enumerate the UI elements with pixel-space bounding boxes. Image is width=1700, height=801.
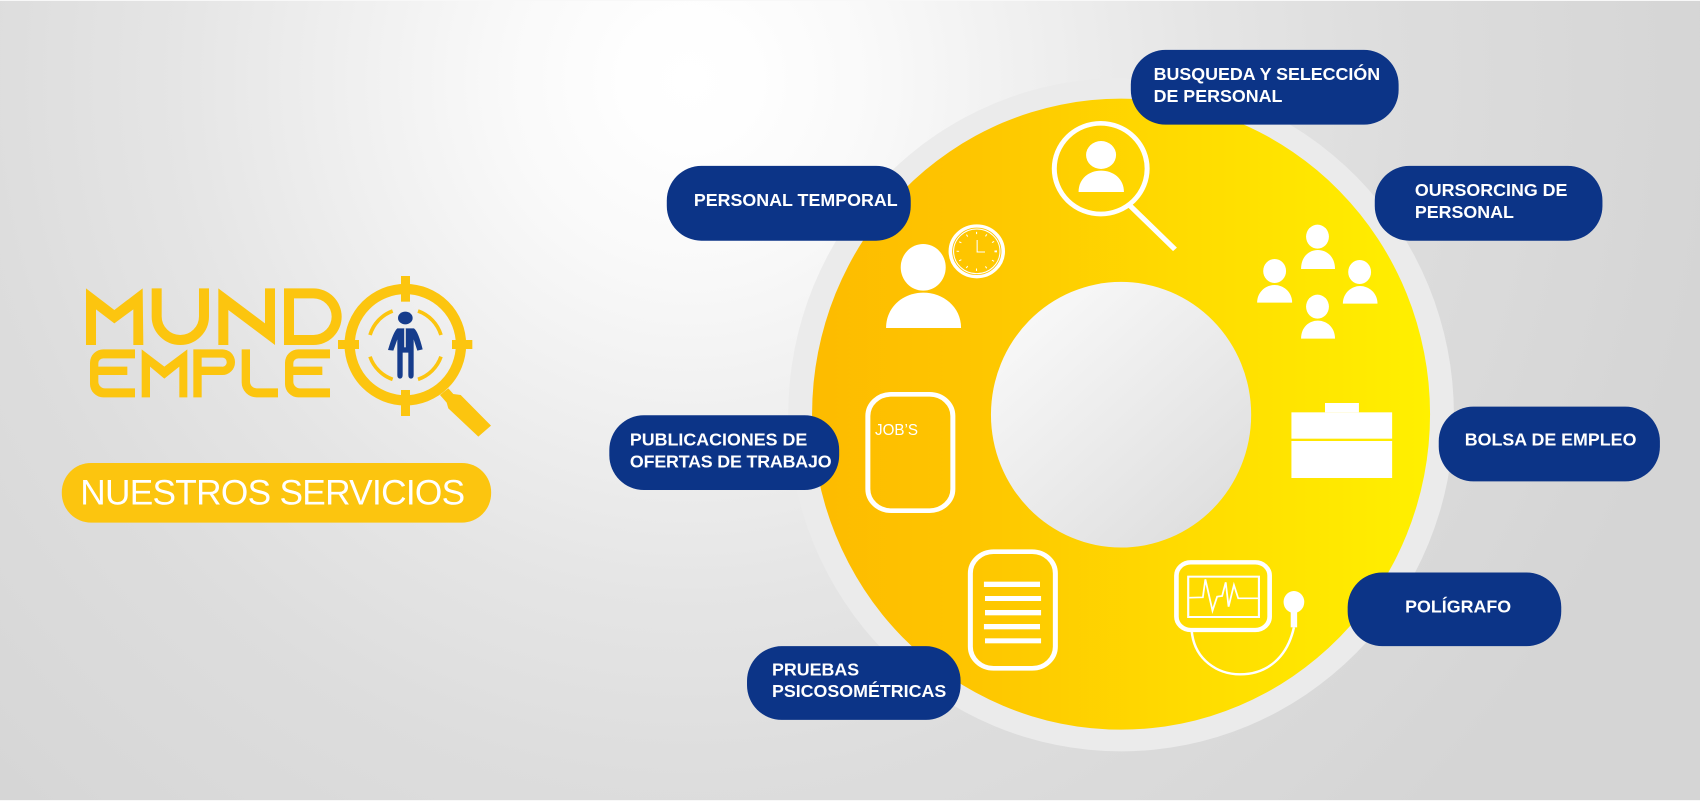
icon label: JOB'S: JOB’S xyxy=(875,422,918,439)
label: publicaciones de ofertas de trabajo: OFERTAS DE TRABAJO xyxy=(630,451,832,471)
icon: temporary person and clock xyxy=(886,226,1003,328)
label: busqueda y seleccion de personal xyxy=(1131,50,1399,125)
label: personal temporal xyxy=(667,166,911,241)
icon: briefcase xyxy=(1291,403,1392,478)
label: poligrafo: POLÍGRAFO xyxy=(1405,596,1511,617)
label: busqueda y seleccion de personal: BUSQUEDA Y SELECCIÓN xyxy=(1154,63,1380,84)
icon: polygraph xyxy=(1176,562,1304,674)
icon: magnifier with person xyxy=(1054,123,1175,249)
label: publicaciones de ofertas de trabajo xyxy=(609,415,839,490)
label: busqueda y seleccion de personal: DE PERSONAL xyxy=(1154,86,1282,106)
icon: test document xyxy=(970,552,1055,668)
icon: group of people xyxy=(1257,225,1377,339)
logo wordmark xyxy=(86,288,342,397)
logo person icon xyxy=(388,312,423,379)
label: personal temporal: PERSONAL TEMPORAL xyxy=(694,190,898,210)
service ring xyxy=(788,78,1454,751)
label: poligrafo xyxy=(1348,572,1561,646)
label: oursorcing de personal xyxy=(1375,166,1602,241)
label: pruebas psicosometricas xyxy=(747,646,961,720)
label: bolsa de empleo xyxy=(1439,407,1660,481)
label: publicaciones de ofertas de trabajo: PUBLICACIONES DE xyxy=(630,430,807,450)
logo magnifier target xyxy=(338,276,491,437)
label: bolsa de empleo: BOLSA DE EMPLEO xyxy=(1465,430,1637,450)
label: oursorcing de personal: PERSONAL xyxy=(1415,202,1514,222)
label: oursorcing de personal: OURSORCING DE xyxy=(1415,180,1568,200)
icon: job document xyxy=(868,394,953,511)
label: pruebas psicosometricas: PRUEBAS xyxy=(772,659,859,679)
heading: nuestros servicios: NUESTROS SERVICIOS xyxy=(80,474,465,513)
label: pruebas psicosometricas: PSICOSOMÉTRICAS xyxy=(772,680,946,701)
logo: Mundo Empleo xyxy=(86,276,491,437)
heading: nuestros servicios xyxy=(62,463,491,523)
